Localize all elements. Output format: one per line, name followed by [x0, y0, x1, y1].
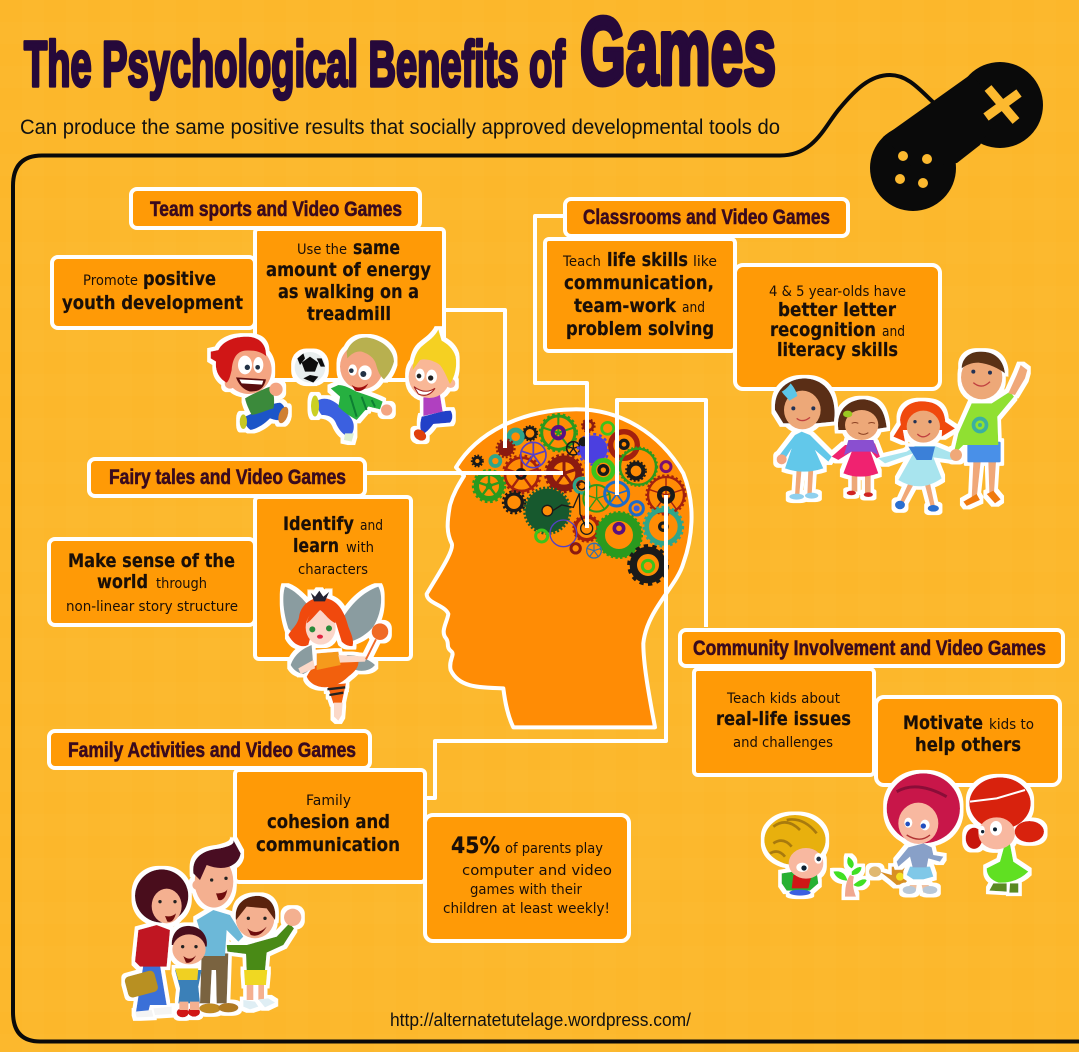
box: identify and learn: [255, 497, 411, 659]
girl in pink: [832, 399, 887, 497]
box: make sense: [49, 539, 255, 625]
connector lines: [365, 216, 706, 798]
box: make sense: non-linear story structure: [66, 599, 238, 615]
box: positive youth development: Promote: [83, 273, 138, 289]
box: life skills: like: [693, 254, 717, 270]
box: letter recognition: [735, 265, 940, 389]
illustration: family of four: [124, 840, 301, 1017]
heading: family activities: [49, 731, 370, 768]
heading: classrooms: [565, 199, 848, 236]
blond curly child: [764, 815, 826, 896]
box: 45 percent of parents: children at least weekly!: [443, 901, 610, 917]
heading: team sports: [131, 189, 420, 228]
heading: community involvement: [680, 630, 1063, 666]
gears: [472, 414, 686, 584]
icon: game controller: [870, 62, 1043, 211]
illustration: four children holding hands: [775, 352, 1027, 512]
illustration: children gardening: [764, 773, 1044, 897]
box: family cohesion: cohesion and: [267, 811, 390, 833]
box: life skills: problem solving: [566, 318, 714, 340]
box: letter recognition: literacy skills: [777, 339, 898, 361]
title: Games: [580, 0, 776, 105]
box: real-life issues: [694, 669, 874, 775]
mother: [124, 869, 188, 1017]
heading: family activities: Family Activities and Video Games: [68, 739, 356, 762]
plant: [833, 857, 867, 897]
box: family cohesion: communication: [256, 834, 400, 856]
boy in lime shirt: [950, 352, 1027, 506]
box: 45 percent of parents: computer and video: [462, 863, 612, 879]
box: motivate: Motivate: [903, 712, 983, 734]
box: positive youth development: [52, 257, 255, 328]
box: letter recognition: 4 & 5 year-olds have: [769, 284, 906, 300]
girl in blue: [775, 378, 835, 500]
daughter: [172, 926, 207, 1017]
box: 45 percent of parents: of parents play: [505, 841, 603, 857]
box: make sense: world: [97, 571, 148, 593]
heading: classrooms: Classrooms and Video Games: [583, 206, 830, 229]
subtitle: Can produce the same positive results that socially approved developmental tools do: [20, 116, 780, 139]
box: identify and learn: learn: [293, 535, 339, 557]
panel: team sports: [52, 189, 456, 443]
box: 45 percent of parents: 45%: [451, 834, 500, 859]
illustration: kid in green: [311, 337, 394, 442]
box: identify and learn: and: [360, 518, 383, 534]
box: identify and learn: characters: [298, 562, 368, 578]
box: 45 percent of parents: games with their: [470, 882, 582, 898]
box: energy treadmill: Use the: [297, 242, 347, 258]
box: motivate: kids to: [989, 717, 1034, 733]
heading: fairy tales: Fairy tales and Video Games: [109, 466, 346, 489]
panel: classrooms: [545, 199, 1027, 512]
son: [227, 896, 301, 1009]
box: energy treadmill: [255, 229, 444, 380]
illustration: kid with red hair: [211, 337, 290, 430]
watering can: [869, 866, 907, 885]
panel: community involvement: [680, 630, 1063, 897]
box: positive youth development: youth development: [62, 292, 243, 314]
box: life skills: [545, 239, 735, 351]
heading: fairy tales: [89, 459, 365, 496]
box: make sense: through: [156, 576, 207, 592]
box: real-life issues: Teach kids about: [726, 691, 840, 707]
box: family cohesion: [235, 770, 425, 882]
girl with red pigtails: [878, 401, 957, 512]
panel: fairy tales: [49, 459, 411, 721]
illustration: soccer ball: [295, 352, 325, 383]
source url: http://alternatetutelage.wordpress.com/: [390, 1010, 691, 1030]
box: life skills: and: [682, 300, 705, 316]
father: [192, 840, 243, 1013]
box: real-life issues: and challenges: [733, 735, 833, 751]
heading: team sports: Team sports and Video Games: [150, 198, 402, 221]
box: energy treadmill: amount of energy: [266, 259, 432, 281]
box: letter recognition: and: [882, 324, 905, 340]
box: life skills: Teach: [562, 254, 601, 270]
box: energy treadmill: treadmill: [307, 303, 391, 325]
box: letter recognition: recognition: [770, 319, 876, 341]
box: life skills: life skills: [607, 249, 688, 271]
box: positive youth development: positive: [143, 268, 216, 290]
head with gears brain: [427, 409, 692, 727]
illustration: blond kid: [409, 329, 456, 443]
box: identify and learn: Identify: [283, 513, 355, 535]
box: identify and learn: with: [346, 540, 374, 556]
box: make sense: Make sense of the: [68, 550, 235, 572]
title: The Psychological Benefits of: [24, 28, 565, 100]
girl with curly red hair: [887, 773, 960, 894]
box: family cohesion: Family: [306, 793, 351, 809]
illustration: fairy: [283, 587, 388, 721]
box: energy treadmill: as walking on a: [278, 281, 419, 303]
box: motivate: [876, 697, 1060, 785]
panel: family activities: [49, 731, 629, 1017]
title: [24, 0, 776, 105]
box: motivate: help others: [915, 734, 1021, 756]
girl in lime dress: [966, 777, 1044, 893]
box: energy treadmill: same: [353, 237, 400, 259]
box: letter recognition: better letter: [778, 299, 897, 321]
box: life skills: communication,: [564, 272, 714, 294]
box: life skills: team-work: [574, 295, 676, 317]
box: 45 percent of parents: [425, 815, 629, 941]
head silhouette: [427, 409, 692, 727]
box: real-life issues: real-life issues: [716, 708, 851, 730]
